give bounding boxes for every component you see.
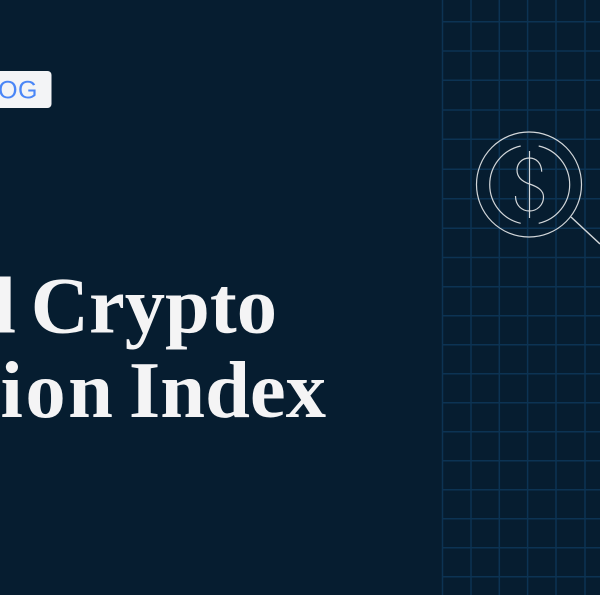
icon: magnifying glass with dollar sign: [476, 132, 600, 244]
title: [0, 262, 326, 435]
title: Crypto: [31, 262, 277, 351]
title: Index: [129, 346, 326, 435]
badge: blog: [0, 71, 52, 108]
